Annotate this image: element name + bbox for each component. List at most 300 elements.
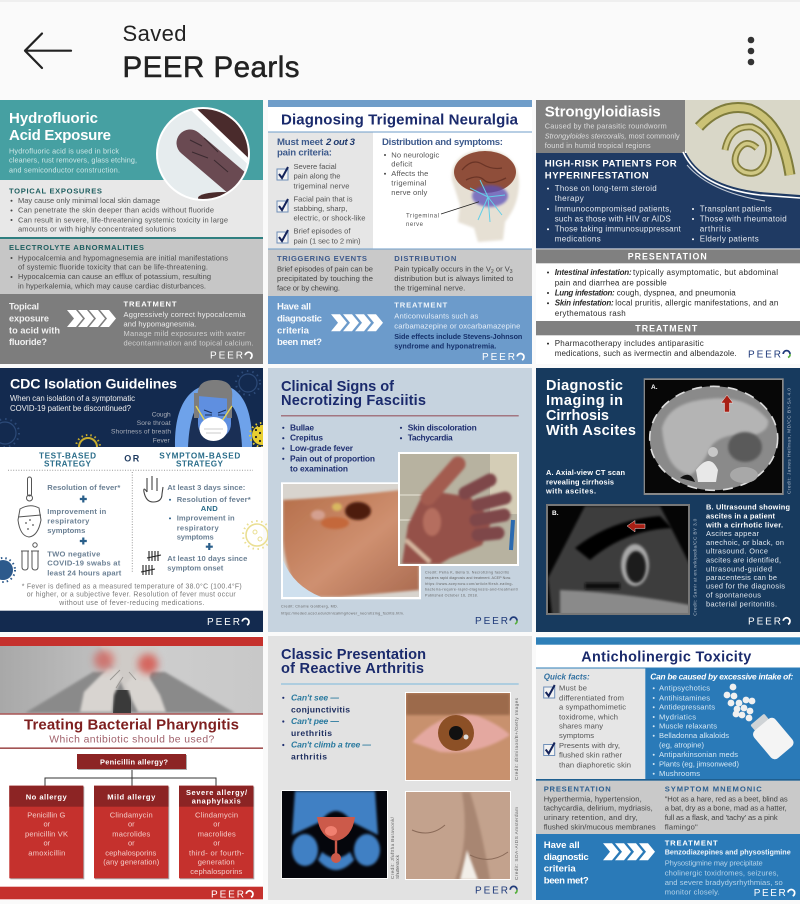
presentation: local pruritis, allergic manifestations, and an	[615, 299, 778, 308]
box: mild allergy: or	[128, 839, 135, 848]
photo: red eye	[405, 692, 511, 781]
box: severe allergy: or	[213, 839, 220, 848]
heading: Which antibiotic should be used?	[49, 735, 215, 746]
credit A: Credit: James Heilman, MD/CC BY-SA 4.0	[786, 388, 792, 494]
heading: Cirrhosis	[546, 408, 609, 424]
question text: criteria	[277, 325, 310, 336]
distribution: 2	[491, 269, 494, 275]
excessive intake list: Antiparkinsonian meds	[659, 750, 738, 759]
image: CT scan	[644, 378, 784, 495]
screen title	[122, 21, 300, 84]
quick facts: Quick facts:	[544, 673, 590, 682]
heading: Diagnosing Trigeminal Neuralgia	[281, 112, 519, 129]
treatment text: monitor closely.	[665, 887, 720, 896]
box: no allergy	[9, 786, 84, 879]
panel: bacterial pharyngitis	[0, 636, 263, 900]
icon: overflow menu	[748, 37, 754, 65]
heading: Imaging in	[546, 393, 623, 409]
clinical signs list: Skin discoloration	[408, 422, 477, 432]
box: no allergy: or	[44, 839, 51, 848]
triggering events: TRIGGERING EVENTS	[277, 254, 367, 263]
footnote: without use of fever-reducing medications.	[58, 600, 204, 607]
box: severe allergy: Severe allergy/	[186, 788, 247, 797]
icon: tally marks	[141, 551, 161, 575]
symptoms list: Shortness of breath	[111, 429, 171, 436]
caption A: with ascites.	[545, 487, 596, 496]
triggering events: face or by chewing.	[277, 283, 340, 292]
caption B: ascites are identified,	[706, 555, 781, 564]
caption B: with a cirrhotic liver.	[705, 520, 783, 529]
treatment text: Side effects include Stevens-Johnson	[394, 332, 522, 341]
high-risk patients: Those with rheumatoid	[700, 214, 787, 223]
symptoms list: Cough	[152, 411, 171, 418]
symptom mnemonic: "Hot as a hare, red as a beet, blind as	[665, 794, 788, 803]
logo: PEER: PEER	[748, 616, 781, 627]
heading: Diagnostic	[546, 378, 623, 394]
illustration: patient with mask	[175, 380, 252, 447]
excessive intake list: Can be caused by excessive intake of:	[650, 672, 794, 682]
symptom mnemonic: SYMPTOM MNEMONIC	[665, 784, 762, 793]
criteria list: electric, or shock-like	[294, 214, 366, 223]
box: no allergy: amoxicillin	[28, 848, 65, 857]
caption B: of spontaneous	[706, 590, 761, 599]
heading: Treating Bacterial Pharyngitis	[24, 717, 239, 734]
panel: anticholinergic toxicity	[536, 636, 800, 900]
clinical signs list: Low-grade fever	[290, 443, 354, 453]
clinical signs list: to examination	[290, 464, 348, 474]
high-risk patients: HIGH-RISK PATIENTS FOR	[545, 159, 677, 170]
section: topical exposures: Can penetrate the skin deeper than acids without fluoride	[18, 206, 214, 215]
quick facts: Presents with dry,	[559, 741, 620, 750]
box: mild allergy: macrolides	[112, 829, 151, 838]
quick facts: symptoms	[559, 731, 594, 740]
distribution: Pain typically occurs in the V	[394, 264, 491, 273]
heading: Classic Presentation	[281, 647, 426, 663]
subtitle: COVID-19 patient be discontinued?	[10, 404, 132, 413]
distribution and symptoms: Distribution and symptoms:	[382, 137, 503, 148]
photo: necrotic leg	[281, 482, 421, 600]
distribution and symptoms: No neurologic	[391, 150, 440, 159]
test-based strategy: Resolution of fever*	[47, 483, 120, 492]
distribution: the trigeminal nerve.	[394, 283, 465, 292]
subtitle: When can isolation of a symptomatic	[10, 394, 135, 403]
treatment text: Aggressively correct hypocalcemia	[124, 310, 246, 319]
caption B: bacterial peritonitis.	[706, 599, 777, 608]
question box: Penicillin allergy?	[100, 758, 168, 767]
triggering events: Brief episodes of pain can be	[277, 264, 373, 273]
treatment text	[665, 839, 791, 896]
flowchart connectors	[45, 769, 216, 786]
symptom-based strategy: At least 3 days since:	[167, 483, 245, 492]
quick facts: shares many	[559, 722, 603, 731]
treatment text: Manage mild exposures with water	[124, 329, 246, 338]
symptom-based strategy: At least 10 days since	[167, 554, 247, 563]
treatment text: cholinergic toxidromes, seizures,	[665, 869, 779, 878]
presentation	[548, 252, 778, 318]
criteria list: pain (1 sec to 2 min)	[294, 236, 361, 245]
high-risk patients: Those on long-term steroid	[555, 184, 657, 193]
presentation: urinary retention, and dry,	[544, 813, 638, 822]
treatment text: carbamazepine or oxcarbamazepine	[394, 321, 520, 330]
test-based strategy: symptoms	[47, 526, 85, 535]
strategy headings: SYMPTOM-BASED	[159, 451, 240, 460]
treatment: Pharmacotherapy includes antiparasitic	[555, 339, 704, 348]
question text: been met?	[544, 875, 589, 886]
intro text	[9, 146, 137, 174]
clinical signs list: Tachycardia	[408, 433, 453, 443]
distribution and symptoms: deficit	[391, 160, 413, 169]
treatment	[548, 323, 737, 358]
icon: checkbox 1	[544, 685, 555, 698]
heading: Acid Exposure	[9, 127, 111, 144]
clinical signs list: Crepitus	[290, 433, 323, 443]
presentation: Intestinal infestation:	[555, 268, 632, 277]
symptom-based strategy: respiratory	[177, 523, 219, 532]
caption A: revealing cirrhosis	[546, 477, 614, 486]
section: topical exposures: May cause only minimal local skin damage	[18, 196, 160, 205]
logo: PEER: PEER	[754, 888, 786, 899]
distribution: or V	[494, 264, 511, 273]
triggering events: precipitated by touching the	[277, 274, 373, 283]
question text	[9, 301, 60, 347]
treatment text: TREATMENT	[394, 300, 448, 309]
distribution and symptoms: nerve only	[391, 188, 428, 197]
box: no allergy: No allergy	[26, 793, 67, 802]
heading	[9, 110, 111, 144]
caption B: ultrasound-guided	[706, 564, 772, 573]
heading	[24, 717, 239, 746]
heading: Anticholinergic Toxicity	[581, 649, 751, 665]
treatment text: Physostigmine may precipitate	[665, 859, 763, 868]
criteria list: Severe facial	[294, 162, 337, 171]
presentation: PRESENTATION	[628, 252, 707, 262]
caption B	[705, 503, 790, 608]
question text	[544, 840, 589, 886]
intro text: found in humid tropical regions	[545, 141, 651, 150]
symptom-based strategy: AND	[201, 504, 218, 513]
treatment text: and hypomagnesmia.	[124, 320, 196, 329]
presentation: pain and diarrhea are possible	[555, 278, 667, 287]
strategy headings: TEST-BASED	[39, 451, 96, 460]
section: electrolyte abnormalities: in hyperkalemia, which may cause cardiac disturbances.	[18, 282, 206, 291]
criteria list: stabbing, sharp,	[294, 204, 348, 213]
criteria list: Brief episodes of	[294, 227, 351, 236]
box: no allergy: Penicillin G	[27, 810, 65, 819]
arrow: red CT arrow	[721, 395, 733, 412]
heading	[281, 647, 426, 677]
test-based strategy: least 24 hours apart	[47, 568, 122, 577]
symptom-based strategy	[141, 476, 251, 575]
photo credits: Published October 16, 2018.	[425, 593, 478, 597]
arrow: chevrons	[331, 314, 383, 331]
box: no allergy: or	[44, 820, 51, 829]
high-risk patients: Elderly patients	[700, 235, 759, 244]
section: topical exposures: TOPICAL EXPOSURES	[9, 186, 102, 195]
presentation: Lung infestation:	[555, 288, 615, 297]
section: topical exposures: Can result in severe, life-threatening systemic toxicity in large	[18, 215, 228, 224]
caption B: ultrasound. Once	[706, 547, 768, 556]
treatment text: decontamination and topical calcium.	[124, 339, 254, 348]
high-risk patients: Immunocompromised patients,	[555, 204, 672, 213]
photo credits: Credit: Charlie Goldberg, MD.	[281, 605, 338, 609]
logo: PEER: PEER	[211, 889, 244, 900]
panel: CDC isolation guidelines	[0, 368, 274, 632]
box: severe allergy: generation	[198, 858, 235, 867]
symptom list: arthritis	[291, 751, 327, 761]
excessive intake list: Plants (eg, jimsonweed)	[659, 759, 739, 768]
section: electrolyte abnormalities: Hypocalcemia and hypomagnesemia are initial manifestations	[18, 253, 228, 262]
symptom list: conjunctivitis	[291, 704, 350, 714]
icon: masked head	[18, 506, 41, 537]
treatment text	[124, 300, 254, 348]
caption B: anechoic, or black, on	[706, 538, 784, 547]
presentation	[544, 784, 656, 832]
panel: strongyloidiasis	[536, 100, 800, 364]
section: topical exposures	[9, 186, 228, 234]
pain criteria: 2 out 3	[325, 137, 356, 148]
logo: PEER: PEER	[748, 350, 781, 360]
logo: PEER: PEER	[207, 617, 240, 628]
image: skull with brain and nerve	[452, 150, 519, 242]
test-based strategy: Improvement in	[47, 507, 107, 516]
pain criteria	[277, 137, 366, 245]
icon: yellow virus right	[249, 422, 263, 447]
intro text: and semiconductor construction.	[9, 165, 120, 174]
intro text	[545, 122, 680, 150]
question text: to acid with	[9, 325, 60, 335]
symptom mnemonic: flamingo"	[665, 823, 698, 832]
caption B: used for the diagnosis	[706, 582, 785, 591]
high-risk patients: arthritis	[700, 225, 731, 234]
clinical signs list	[283, 422, 477, 474]
excessive intake list: Antihistamines	[659, 693, 710, 702]
pain criteria: pain criteria:	[277, 148, 332, 159]
image: CT scan: A.	[651, 384, 658, 391]
question text: Have all	[544, 840, 580, 851]
excessive intake list: Antidepressants	[659, 703, 715, 712]
intro text: cleaners, rust removers, glass etching,	[9, 156, 137, 165]
excessive intake list: (eg, atropine)	[659, 740, 704, 749]
icon: virus outline top right	[236, 371, 260, 395]
icon: checkbox 1	[277, 167, 288, 180]
presentation: erythematous rash	[555, 309, 626, 318]
caption A: A. Axial-view CT scan	[546, 468, 625, 477]
icon: test tubes	[21, 543, 39, 570]
logo: PEER: PEER	[475, 885, 508, 896]
symptom-based strategy: symptom onset	[167, 564, 224, 573]
pain criteria: Must meet	[277, 137, 324, 148]
icon: hand with three fingers	[144, 476, 163, 502]
section: electrolyte abnormalities: Hypocalcemia can cause an efflux of potassium, resulting	[18, 272, 211, 281]
icon: thermometer	[26, 477, 32, 501]
test-based strategy	[18, 477, 122, 577]
symptom-based strategy: symptoms	[177, 533, 214, 542]
presentation: PRESENTATION	[544, 784, 611, 793]
credit: x-ray: Shutterstock	[395, 854, 401, 879]
excessive intake list: Muscle relaxants	[659, 722, 717, 731]
symptoms list: Fever	[153, 437, 170, 444]
section: topical exposures: amounts or with highly concentrated solutions	[18, 225, 176, 234]
panel: hydrofluoric acid exposure	[0, 100, 263, 364]
screen title: Saved	[122, 21, 186, 46]
photo: burned finger	[156, 107, 250, 201]
section: electrolyte abnormalities: ELECTROLYTE ABNORMALITIES	[9, 243, 144, 252]
panel: cirrhosis imaging	[536, 368, 800, 632]
heading	[281, 379, 426, 409]
question text	[277, 301, 323, 348]
treatment text: and severe bradydysrhythmias, so	[665, 878, 783, 887]
treatment text: TREATMENT	[665, 839, 718, 848]
presentation: Skin infestation:	[555, 299, 614, 308]
presentation: cough, dyspnea, and pneumonia	[617, 288, 736, 297]
treatment: medications, such as ivermectin and albendazole.	[555, 349, 737, 358]
distribution: 3	[510, 269, 513, 275]
heading: Strongyloidiasis	[545, 104, 661, 121]
high-risk patients	[545, 159, 787, 244]
treatment text: TREATMENT	[124, 300, 177, 309]
callout: trigeminal nerve	[406, 202, 479, 228]
box: severe allergy: cephalosporins	[190, 867, 243, 876]
treatment text	[394, 300, 522, 351]
excessive intake list	[650, 672, 794, 778]
footnote	[22, 582, 242, 607]
distribution and symptoms	[382, 137, 503, 197]
logo: PEER: PEER	[475, 616, 508, 627]
callout: trigeminal nerve: nerve	[406, 222, 424, 228]
screen title: PEER Pearls	[122, 51, 300, 84]
icon: virus outline left	[0, 419, 19, 447]
app header bar	[0, 0, 800, 100]
intro text: Strongyloides stercoralis, most commonly	[545, 131, 680, 140]
symptom list: urethritis	[291, 728, 332, 738]
high-risk patients: medications	[555, 235, 601, 244]
question text: exposure	[9, 314, 49, 324]
criteria list: trigeminal nerve	[294, 181, 350, 190]
caption B: B. Ultrasound showing	[706, 503, 790, 512]
symptom mnemonic	[665, 784, 788, 832]
box: severe allergy: macrolides	[198, 829, 236, 838]
strategy headings: OR	[124, 454, 140, 464]
quick facts: differentiated from	[559, 693, 624, 702]
question text: been met?	[277, 337, 322, 348]
box: severe allergy: anaphylaxis	[192, 796, 241, 805]
credit: knee photo: Credit: SOA-AIDS Amsterdam	[514, 807, 520, 880]
panel: necrotizing fasciitis	[268, 368, 532, 632]
box: mild allergy: cephalosporins	[105, 848, 157, 857]
excessive intake list: Belladonna alkaloids	[659, 731, 729, 740]
quick facts	[544, 673, 631, 769]
credit: x-ray: Credit: Jfufttha Burawonk/	[390, 816, 396, 879]
intro text: Caused by the parasitic roundworm	[545, 122, 667, 131]
quick facts: than diaphoretic skin	[559, 760, 631, 769]
footnote: * Fever is defined as a measured temperature of 38.0°C (100.4°F)	[22, 582, 242, 590]
symptoms list	[111, 411, 171, 444]
quick facts: flushed skin rather	[559, 751, 622, 760]
box: mild allergy: Mild allergy	[107, 793, 156, 802]
box: severe allergy: third- or fourth-	[189, 848, 244, 857]
clinical signs list: Bullae	[290, 422, 314, 432]
caption A	[545, 468, 625, 496]
symptom-based strategy: Improvement in	[177, 514, 235, 523]
box: severe allergy	[179, 786, 254, 879]
image: spilled pill bottle	[724, 684, 796, 761]
footnote: or higher, or a subjective fever. Resolution of fever must occur	[27, 592, 236, 599]
photo credits: https://meded.ucsd.edu/clinicalimg/lower_necrotizing_fsciitis.htm.	[281, 611, 404, 615]
credit B: Credit: Samir at en.wikipedia/CC BY 3.0	[692, 518, 698, 616]
box: mild allergy: (any generation)	[103, 858, 160, 867]
test-based strategy: COVID-19 swabs at	[47, 559, 121, 568]
box: mild allergy	[94, 786, 169, 879]
distribution and symptoms: Affects the	[391, 169, 428, 178]
treatment text: Anticonvulsants such as	[394, 312, 479, 321]
box: severe allergy: Clindamycin	[195, 810, 238, 819]
quick facts: toxidrome, which	[559, 712, 618, 721]
caption B: paracentesis can be	[706, 573, 777, 582]
image: ultrasound: B.	[552, 510, 559, 517]
image: roundworm micrograph	[683, 100, 800, 201]
icon: checkbox 2	[544, 742, 555, 756]
criteria list: Facial pain that is	[294, 194, 353, 203]
excessive intake list: Mushrooms	[659, 769, 700, 778]
presentation: tachycardia, delirium, mydriasis,	[544, 804, 653, 813]
icon: yellow virus center	[75, 434, 101, 447]
icon: blue virus	[0, 558, 15, 582]
symptom list: Can't see —	[291, 692, 339, 702]
excessive intake list: Antipsychotics	[659, 684, 710, 693]
photo credits: https://www.acepnow.com/article/flesh-eating-	[425, 582, 514, 586]
heading: Hydrofluoric	[9, 110, 98, 127]
criteria list	[294, 162, 366, 245]
photo: hands on throat	[0, 640, 263, 713]
icon: checkbox 3	[277, 230, 288, 243]
image: ultrasound	[546, 504, 690, 615]
credit: eye photo: Credit: dtimiraos/E+/Getty Images	[514, 697, 520, 780]
intro text: Hydrofluoric acid is used in brick	[9, 146, 119, 155]
photo credits: bacteria-require-rapid-diagnosis-and-treatment/	[425, 588, 519, 592]
heading	[546, 378, 636, 439]
symptom list: Can't climb a tree —	[291, 739, 371, 749]
heading: Clinical Signs of	[281, 379, 394, 395]
question text: Have all	[277, 301, 311, 312]
high-risk patients: Transplant patients	[700, 204, 772, 213]
section: electrolyte abnormalities: of systemic fluoride toxicity that can be life-threatening.	[18, 262, 208, 271]
icon: back arrow	[25, 34, 71, 68]
heading: of Reactive Arthritis	[281, 661, 424, 677]
question text: diagnostic	[544, 852, 589, 863]
symptom list: Can't pee —	[291, 716, 339, 726]
image: pelvis x-ray	[282, 790, 388, 879]
distribution and symptoms: trigeminal	[391, 179, 427, 188]
symptom mnemonic: full as a flask, and 'tachy' as a pink	[665, 813, 778, 822]
caption B: Ascites appear	[706, 529, 760, 538]
box: severe allergy: or	[213, 820, 220, 829]
criteria list: pain along the	[294, 172, 340, 181]
clinical signs list: Pain out of proportion	[290, 453, 375, 463]
photo credits: requires rapid diagnosis and treatment. ACEP Now.	[425, 576, 511, 580]
box: no allergy: penicillin VK	[25, 829, 68, 838]
heading: Necrotizing Fasciitis	[281, 393, 426, 409]
symptom-based strategy: Resolution of fever*	[177, 495, 251, 504]
heading: CDC Isolation Guidelines	[10, 376, 177, 392]
box: mild allergy: or	[128, 820, 135, 829]
symptoms list: Sore throat	[137, 420, 171, 427]
distribution	[394, 254, 513, 292]
photo: swollen knees	[405, 791, 511, 880]
photo credits	[281, 570, 519, 615]
treatment text: Benzodiazepines and physostigmine	[665, 848, 791, 857]
strategy headings: STRATEGY	[176, 460, 224, 469]
panel: reactive arthritis	[268, 636, 532, 900]
